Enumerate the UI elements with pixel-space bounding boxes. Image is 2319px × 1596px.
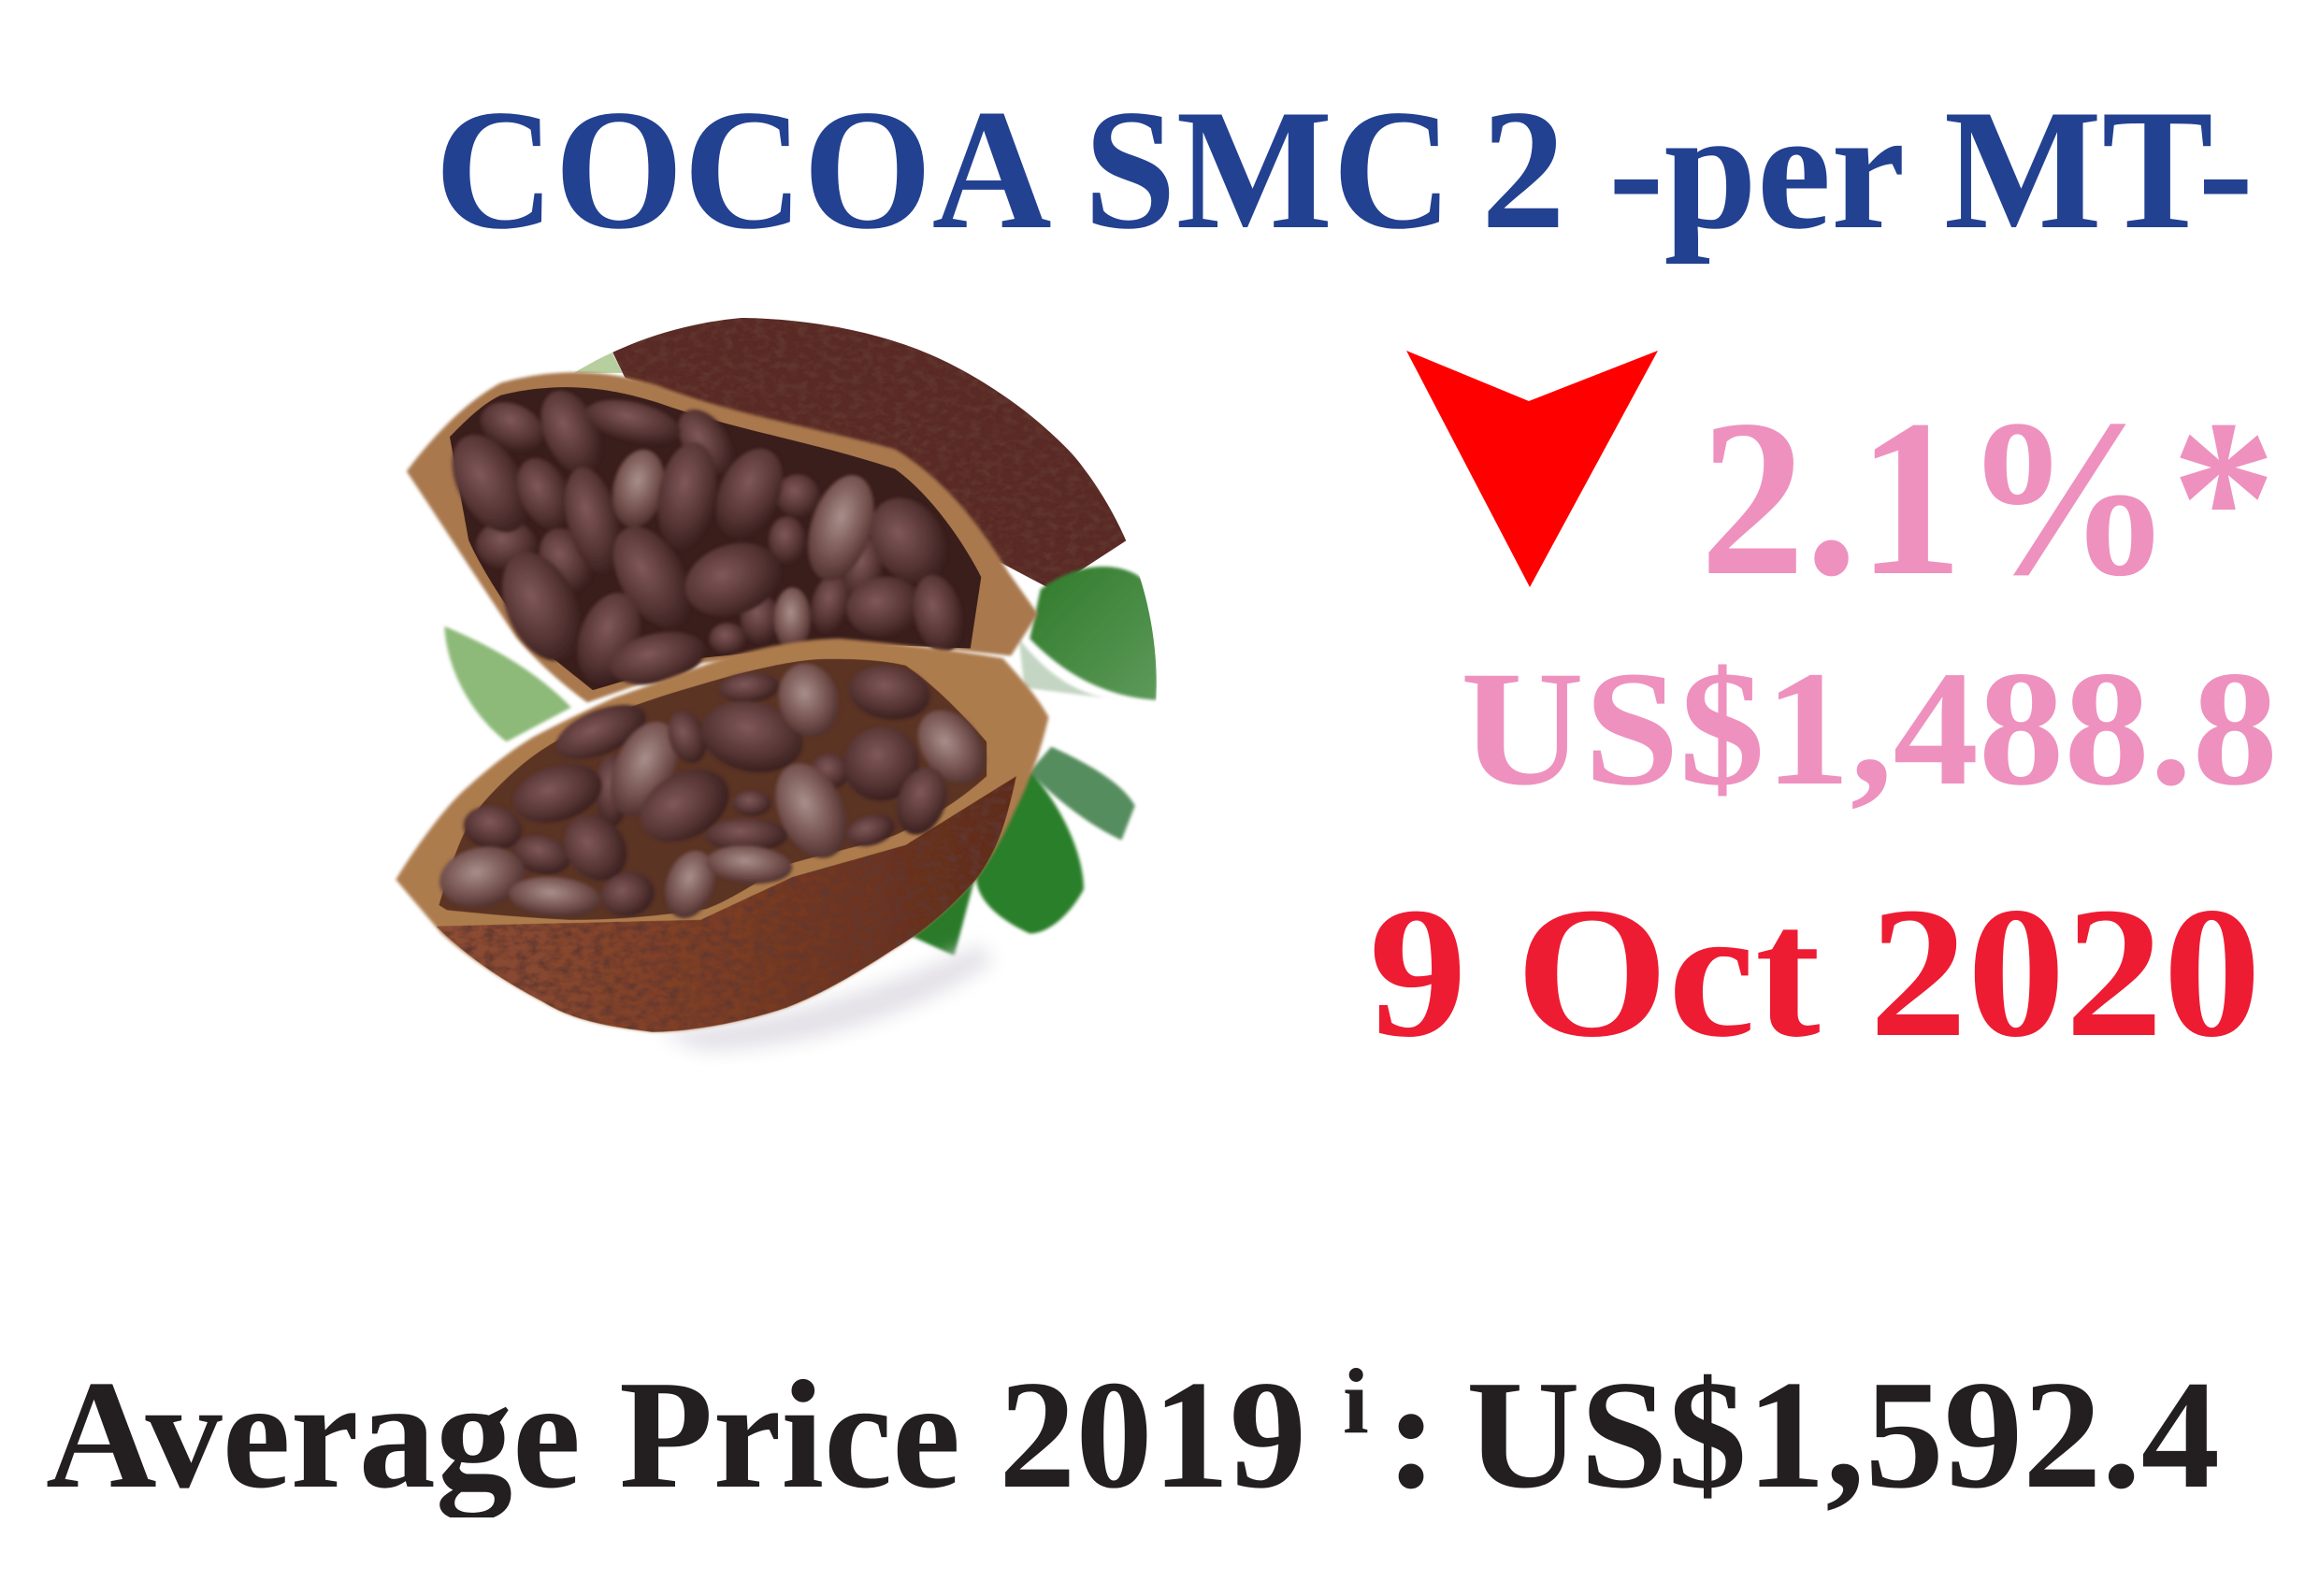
back cocoa pod [496,318,1158,700]
average price 2019: : [1386,1348,1437,1520]
title: 2 [1481,74,1565,265]
date: 9 Oct 2020 [1369,870,2261,1076]
ground shadow [657,943,992,1052]
average price 2019: i [1343,1349,1369,1453]
bottom pod half [396,639,1048,1032]
percentage change: 2.1% [1700,373,2173,622]
average price 2019: Average Price 2019 [46,1348,1306,1521]
leaves bottom right [906,747,1135,956]
current price: US$1,488.8 [1461,638,2278,820]
image: open cocoa pods with beans and leaves [396,318,1158,1052]
leaf right [1030,567,1158,700]
top pod half [407,372,1038,702]
bottom pod beans [432,659,999,923]
leaf behind, top left [574,352,623,373]
top pod beans [437,383,969,694]
leaf left [444,626,571,741]
average price 2019: US$1,592.4 [1466,1348,2220,1520]
title: COCOA SMC [435,74,1452,265]
percentage change: * [2171,373,2276,622]
title: -per MT- [1608,74,2254,265]
icon: red down arrow [1406,351,1658,587]
average price 2019 [47,1368,2217,1517]
title [435,74,2254,265]
